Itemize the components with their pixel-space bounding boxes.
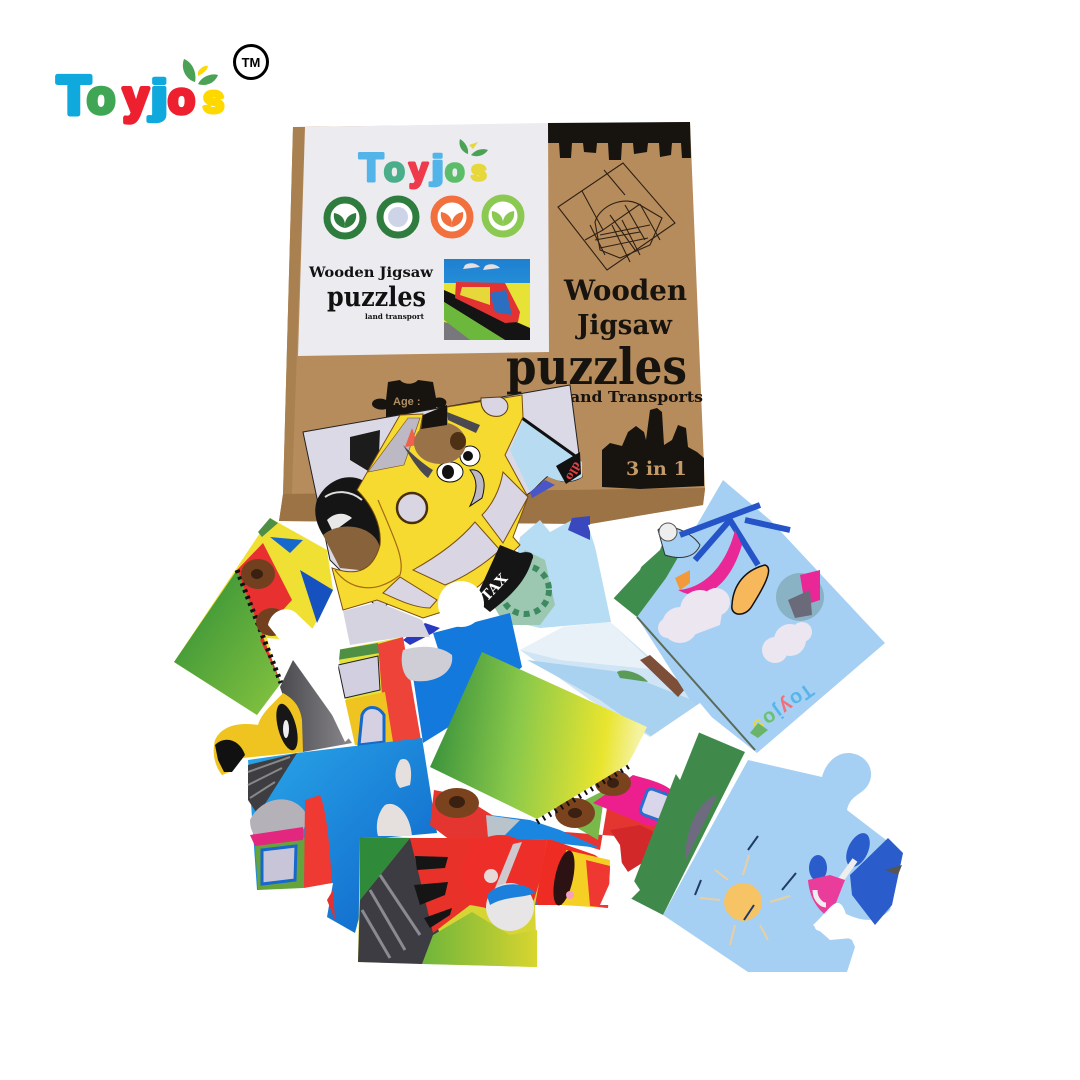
brand logo: y bbox=[123, 71, 149, 123]
3 in 1 skyline badge: 3 in 1 bbox=[626, 458, 687, 480]
bicycle fragment bbox=[808, 829, 903, 925]
brand logo bbox=[57, 46, 268, 126]
brand logo: j bbox=[149, 71, 169, 122]
reflective light-blue pieces bbox=[520, 622, 700, 737]
certification badges bbox=[327, 198, 521, 236]
clouds bbox=[658, 588, 812, 663]
label logo: T bbox=[359, 146, 383, 190]
top left train piece bbox=[174, 518, 333, 715]
taxi hole bbox=[414, 422, 466, 464]
label train picture bbox=[444, 259, 530, 340]
bottom train piece bbox=[358, 835, 547, 967]
right red funnel fragment bbox=[500, 840, 610, 908]
train puzzle sketch bbox=[558, 163, 675, 270]
light-blue puzzle piece behind taxi bbox=[303, 385, 584, 610]
green-yellow gradient piece bbox=[430, 652, 647, 819]
label logo: s bbox=[471, 155, 487, 186]
light-blue puzzle piece behind taxi: dlo bbox=[563, 460, 584, 483]
pale grey piece under taxi bbox=[343, 602, 430, 645]
white product label bbox=[298, 123, 549, 356]
label title bbox=[308, 265, 433, 321]
label logo: y bbox=[409, 151, 428, 189]
age puzzle badge bbox=[372, 380, 446, 440]
brand logo: T bbox=[57, 64, 91, 126]
age puzzle badge: Age : bbox=[393, 396, 420, 408]
blue piece with notch bbox=[403, 613, 522, 743]
3 in 1 skyline badge bbox=[602, 408, 704, 489]
light-blue ferris wheel piece bbox=[490, 516, 611, 628]
label logo: j bbox=[430, 149, 444, 186]
label title: land transport bbox=[365, 312, 425, 321]
black drip band bbox=[548, 122, 691, 160]
piece brand mark: Toyjos bbox=[748, 679, 818, 737]
grey and yellow car piece bbox=[214, 660, 352, 775]
box side title: puzzles bbox=[506, 337, 687, 396]
cardboard box bbox=[279, 122, 705, 524]
white cut-outs between pieces bbox=[268, 520, 735, 905]
taxi wheel bbox=[315, 477, 382, 572]
label logo bbox=[359, 139, 488, 190]
label title: puzzles bbox=[327, 282, 426, 313]
label title: Wooden Jigsaw bbox=[308, 265, 433, 281]
label logo: o bbox=[445, 152, 465, 188]
box side title: Jigsaw bbox=[575, 310, 673, 341]
label logo: o bbox=[384, 151, 405, 189]
blue train piece bbox=[248, 738, 437, 933]
taxi puzzle piece: TAX bbox=[478, 571, 511, 605]
top right bicycle piece bbox=[612, 480, 885, 753]
box side title: land Transports bbox=[564, 388, 703, 406]
box side title: Wooden bbox=[563, 274, 687, 307]
box side title bbox=[506, 274, 703, 406]
taxi puzzle piece bbox=[315, 395, 533, 618]
brand logo: o bbox=[168, 74, 195, 123]
brand logo: TM bbox=[242, 55, 260, 70]
brand logo: o bbox=[87, 71, 115, 123]
brand logo: s bbox=[203, 79, 224, 121]
centre train piece bbox=[337, 637, 452, 745]
taxi eyes bbox=[403, 412, 484, 506]
bottom right sun piece bbox=[628, 730, 903, 972]
taxi windows bbox=[383, 472, 528, 608]
tractor wheel area under green piece bbox=[430, 765, 680, 875]
